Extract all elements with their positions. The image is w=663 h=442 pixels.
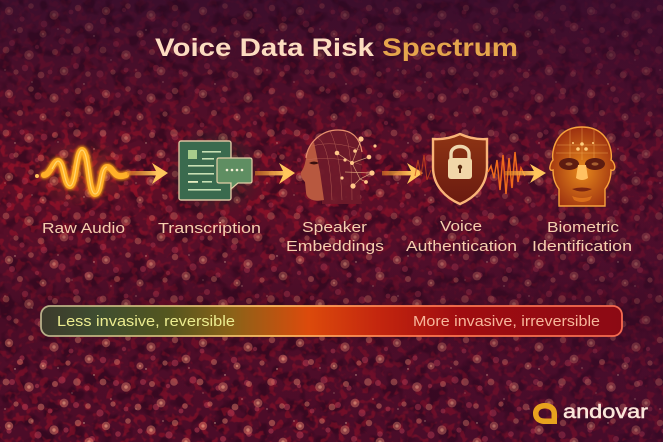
logo: andovar: andovar bbox=[563, 402, 649, 423]
arrow: raw audio to transcription bbox=[127, 163, 168, 184]
risk spectrum bar bbox=[41, 306, 622, 336]
bar label: more invasive: More invasive, irreversible bbox=[413, 314, 600, 330]
title: Voice Data Risk Spectrum bbox=[155, 34, 518, 62]
label: voice authentication: Voice bbox=[440, 219, 482, 235]
label: raw audio: Raw Audio bbox=[42, 221, 125, 237]
icon: biometric identification face bbox=[540, 118, 624, 218]
icon: speaker embeddings head with network bbox=[301, 130, 377, 204]
logo: andovar bbox=[533, 402, 649, 424]
label: speaker embeddings bbox=[286, 220, 384, 255]
label: voice authentication: Authentication bbox=[406, 239, 517, 255]
arrow: transcription to speaker embeddings bbox=[255, 163, 295, 184]
arrow: speaker embeddings to voice authentication bbox=[382, 163, 423, 184]
label: biometric identification bbox=[532, 220, 632, 255]
label: speaker embeddings: Embeddings bbox=[286, 239, 384, 255]
label: speaker embeddings: Speaker bbox=[302, 220, 367, 236]
label: transcription: Transcription bbox=[158, 221, 261, 237]
icon: raw audio waveform bbox=[30, 137, 134, 209]
label: biometric identification: Identification bbox=[532, 239, 632, 255]
arrow and sound wave: voice authentication to biometric identification bbox=[488, 152, 546, 194]
icon: voice authentication shield with padlock bbox=[415, 134, 487, 204]
bar label: less invasive: Less invasive, reversible bbox=[57, 314, 235, 330]
label: voice authentication bbox=[406, 219, 517, 255]
icon: transcription document with chat bubble bbox=[164, 128, 264, 216]
label: biometric identification: Biometric bbox=[547, 220, 619, 236]
